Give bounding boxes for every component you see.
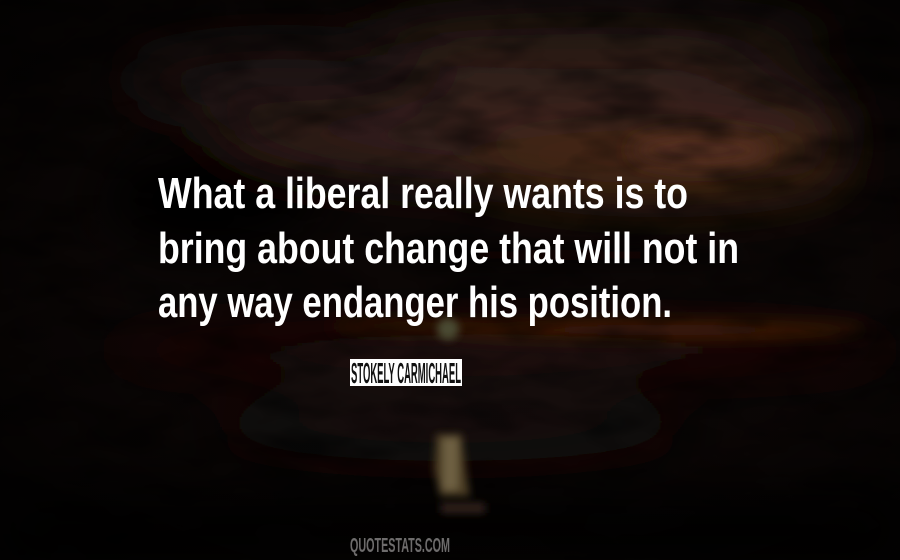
quote text: bring about change that will not in [158, 224, 739, 273]
quote text [158, 169, 739, 327]
source watermark: QUOTESTATS.COM [350, 535, 450, 557]
sun glow [437, 318, 459, 340]
text: STOKELY CARMICHAEL [351, 358, 461, 390]
quote text: What a liberal really wants is to [158, 169, 688, 218]
author label [350, 358, 462, 390]
sun reflection on water [434, 434, 485, 513]
quote text: any way endanger his position. [158, 278, 672, 327]
